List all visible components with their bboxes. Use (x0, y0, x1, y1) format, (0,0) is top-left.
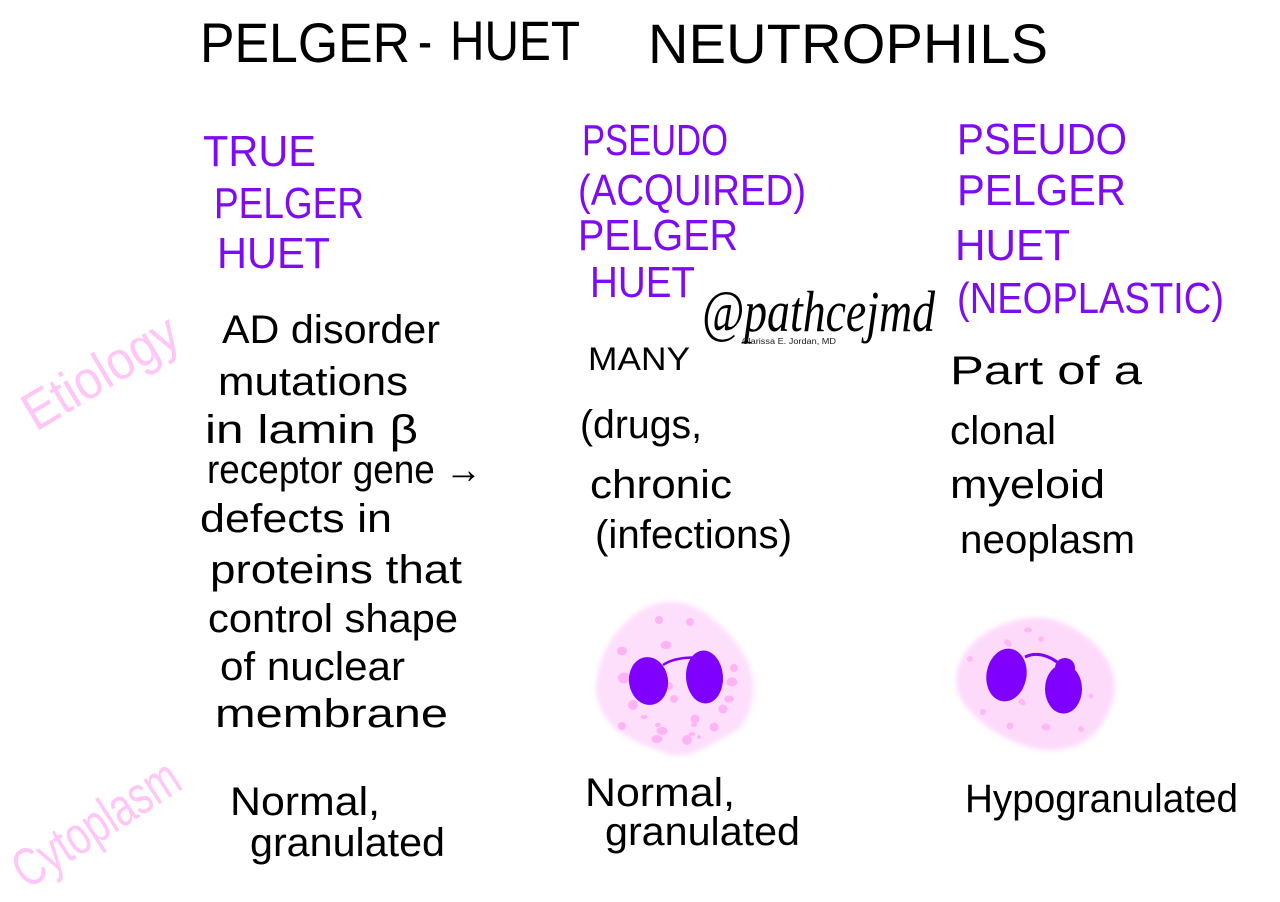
etiology text: pseudo acquired: (infections) (595, 513, 792, 557)
etiology text: true Pelger-Huet: receptor gene → (207, 448, 482, 492)
heading: pseudo neoplastic Pelger-Huet (955, 115, 1224, 323)
heading: pseudo neoplastic Pelger-Huet: PSEUDO (957, 115, 1127, 164)
cytoplasm text: true Pelger-Huet (230, 780, 445, 865)
cytoplasm text: pseudo acquired: Normal, (585, 771, 735, 815)
etiology text: pseudo neoplastic (950, 349, 1143, 562)
watermark: @pathcejmd (702, 279, 936, 344)
etiology text: pseudo acquired: MANY (588, 341, 690, 377)
etiology text: true Pelger-Huet: AD disorder (222, 308, 440, 352)
row label: cytoplasm: Cytoplasm (1, 747, 191, 900)
title: HUET (450, 9, 580, 72)
cell: pseudo neoplastic neutrophil (956, 617, 1115, 750)
watermark: Clarissa E. Jordan, MD (742, 337, 836, 346)
heading: pseudo neoplastic Pelger-Huet: PELGER (957, 166, 1126, 215)
nucleus (626, 649, 725, 707)
granules (617, 616, 738, 745)
heading: pseudo acquired Pelger-Huet: (ACQUIRED) (578, 166, 806, 215)
heading: true Pelger-Huet: TRUE (203, 127, 316, 176)
etiology text: pseudo neoplastic: neoplasm (960, 518, 1135, 562)
title: PELGER (200, 11, 410, 74)
heading: true Pelger-Huet (203, 127, 364, 278)
etiology text: pseudo neoplastic: clonal (950, 409, 1056, 453)
title: - (418, 9, 432, 72)
granules (967, 628, 1094, 732)
cytoplasm text: true Pelger-Huet: granulated (250, 821, 445, 865)
etiology text: true Pelger-Huet (200, 308, 482, 736)
etiology text: pseudo acquired (580, 341, 792, 557)
heading: pseudo acquired Pelger-Huet (578, 116, 806, 307)
cytoplasm (956, 617, 1115, 750)
cell: pseudo acquired neutrophil (596, 602, 753, 755)
heading: pseudo acquired Pelger-Huet: PSEUDO (582, 116, 728, 165)
heading: pseudo neoplastic Pelger-Huet: (NEOPLASTIC) (957, 274, 1224, 323)
etiology text: pseudo acquired: chronic (590, 463, 732, 507)
title (200, 9, 1048, 75)
cytoplasm (596, 602, 753, 755)
nucleus (982, 645, 1082, 714)
row label: etiology: Etiology (11, 302, 190, 442)
etiology text: pseudo neoplastic: Part of a (950, 349, 1143, 393)
heading: true Pelger-Huet: PELGER (214, 179, 364, 228)
etiology text: true Pelger-Huet: proteins that (210, 548, 462, 592)
cytoplasm text: true Pelger-Huet: Normal, (230, 780, 380, 824)
etiology text: true Pelger-Huet: of nuclear (220, 645, 405, 689)
etiology text: true Pelger-Huet: membrane (215, 692, 448, 736)
etiology text: true Pelger-Huet: defects in (200, 497, 392, 541)
etiology text: true Pelger-Huet: in lamin β (205, 408, 418, 452)
etiology text: pseudo neoplastic: myeloid (950, 463, 1105, 507)
cytoplasm text: pseudo neoplastic: Hypogranulated (965, 777, 1238, 821)
heading: pseudo acquired Pelger-Huet: PELGER (578, 211, 738, 260)
cytoplasm text: pseudo acquired (585, 771, 800, 854)
etiology text: true Pelger-Huet: mutations (218, 360, 408, 404)
etiology text: pseudo acquired: (drugs, (580, 403, 702, 447)
heading: pseudo acquired Pelger-Huet: HUET (590, 258, 695, 307)
etiology text: true Pelger-Huet: control shape (208, 597, 458, 641)
heading: true Pelger-Huet: HUET (217, 229, 330, 278)
title: NEUTROPHILS (648, 12, 1048, 75)
heading: pseudo neoplastic Pelger-Huet: HUET (955, 221, 1070, 270)
cytoplasm text: pseudo acquired: granulated (605, 810, 800, 854)
